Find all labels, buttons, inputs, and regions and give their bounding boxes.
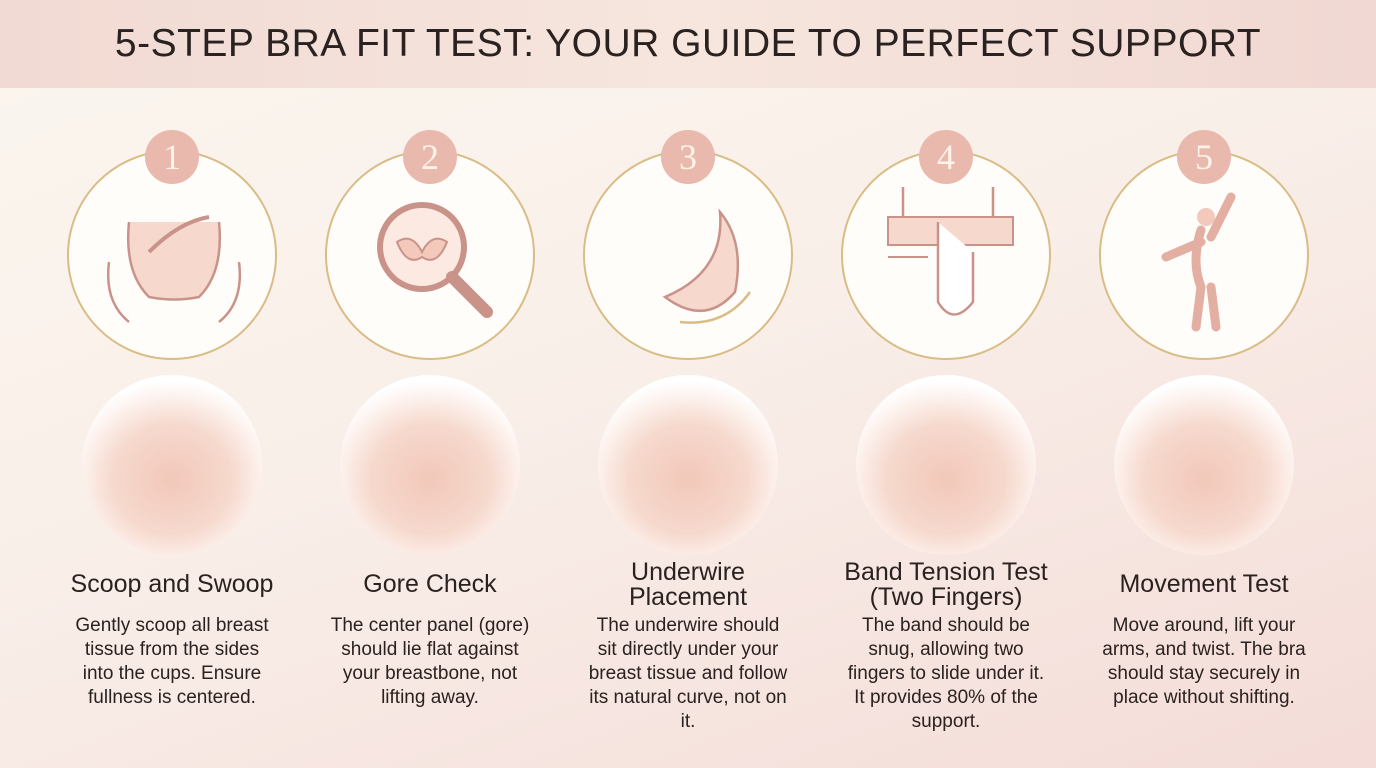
text 2: The center panel (gore): [331, 615, 529, 636]
text 1: Gently scoop all breast: [75, 615, 269, 636]
icon: scoop: [67, 150, 277, 360]
text 3: sit directly under your: [598, 639, 778, 660]
text 2: your breastbone, not: [343, 663, 517, 684]
text 5: Move around, lift your: [1113, 615, 1295, 636]
badge 1: [145, 130, 199, 184]
photo 5: [1114, 375, 1294, 555]
badge 2: 2: [421, 137, 439, 177]
panel: step 2: [325, 130, 535, 708]
text 3: [589, 615, 788, 732]
heading 3: [629, 558, 747, 611]
heading 3: Underwire: [631, 558, 745, 586]
text 1: [75, 615, 269, 708]
text 2: lifting away.: [381, 687, 479, 708]
text 5: [1102, 615, 1306, 708]
title: [0, 0, 1376, 88]
text 5: place without shifting.: [1113, 687, 1295, 708]
badge 5: [1177, 130, 1231, 184]
badge 4: [919, 130, 973, 184]
panel: step 4: [841, 130, 1051, 732]
badge 3: 3: [679, 137, 697, 177]
text 1: tissue from the sides: [85, 639, 259, 660]
icon: magnifier: [325, 150, 535, 360]
badge 5: 5: [1195, 137, 1213, 177]
panel: step 3: [583, 130, 793, 732]
text 4: [848, 615, 1044, 732]
text 2: should lie flat against: [341, 639, 519, 660]
photo 3: [598, 375, 778, 555]
photo 4: [856, 375, 1036, 555]
heading 3: Placement: [629, 583, 747, 611]
badge 2: [403, 130, 457, 184]
heading 4: (Two Fingers): [870, 583, 1022, 611]
icon: figure: [1099, 150, 1309, 360]
panel: step 5: [1099, 130, 1309, 708]
text 2: [331, 615, 529, 708]
heading 1: Scoop and Swoop: [71, 570, 273, 598]
text 3: it.: [681, 711, 695, 732]
text 5: should stay securely in: [1108, 663, 1300, 684]
icon: underwire: [583, 150, 793, 360]
text 4: support.: [912, 711, 980, 732]
text 4: It provides 80% of the: [854, 687, 1038, 708]
text 3: breast tissue and follow: [589, 663, 787, 684]
badge 4: 4: [937, 137, 955, 177]
heading 5: Movement Test: [1119, 570, 1289, 598]
text 5: arms, and twist. The bra: [1102, 639, 1306, 660]
heading 4: Band Tension Test: [844, 558, 1048, 586]
icon: band: [841, 150, 1051, 360]
text 3: its natural curve, not on: [589, 687, 787, 708]
text 4: snug, allowing two: [868, 639, 1024, 660]
photo 1: [82, 375, 262, 555]
badge 3: [661, 130, 715, 184]
text 3: The underwire should: [597, 615, 779, 636]
badge 1: 1: [163, 137, 181, 177]
text 4: fingers to slide under it.: [848, 663, 1044, 684]
heading 4: [844, 558, 1048, 611]
text 4: The band should be: [862, 615, 1030, 636]
photo 2: [340, 375, 520, 555]
text 1: into the cups. Ensure: [83, 663, 261, 684]
heading 2: Gore Check: [363, 570, 497, 598]
title: 5-STEP BRA FIT TEST: YOUR GUIDE TO PERFECT SUPPORT: [115, 22, 1261, 65]
panel: step 1: [67, 130, 277, 708]
text 1: fullness is centered.: [88, 687, 256, 708]
